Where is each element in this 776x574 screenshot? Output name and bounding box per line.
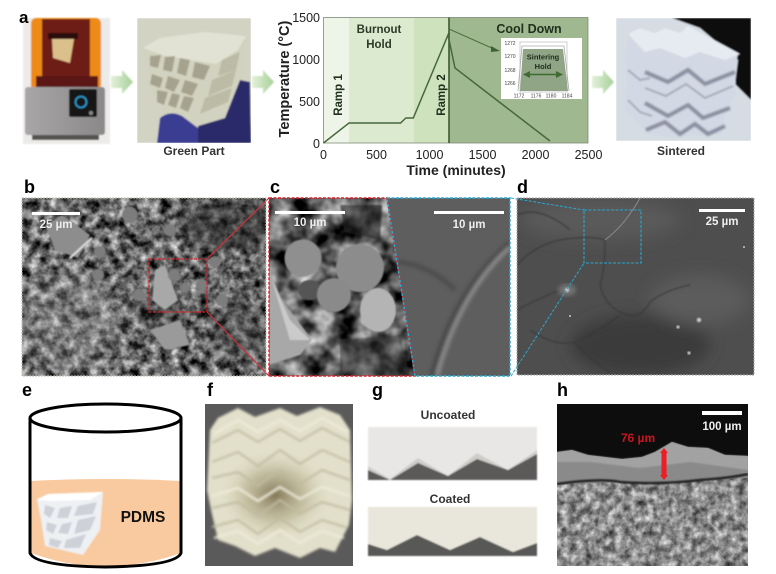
scale bar c right xyxy=(434,211,504,231)
zone label: ramp 2: Ramp 2 xyxy=(436,74,448,116)
label: Uncoated: Uncoated xyxy=(421,408,475,422)
inset: sintering hold: 1184 xyxy=(562,94,573,100)
panel c: smooth coated SEM image xyxy=(387,198,510,376)
scale bar c left: 10 µm xyxy=(294,217,326,229)
panel f label: f xyxy=(207,380,214,400)
scale bar b xyxy=(32,212,80,231)
inset: sintering hold: 1180 xyxy=(546,94,557,100)
zone: cool down xyxy=(449,18,588,143)
blue zoom lines c to d xyxy=(511,198,584,376)
inset: sintering hold: 1270 xyxy=(504,54,516,60)
immersed lattice xyxy=(37,492,103,555)
zone label: cool down: Cool Down xyxy=(496,22,562,36)
zone label: burnout hold: Hold xyxy=(366,39,392,51)
y axis tick labels: 1000 xyxy=(292,53,320,67)
zone: ramp 2 xyxy=(414,18,449,143)
scale bar d xyxy=(699,209,745,228)
panel c label: c xyxy=(270,177,280,197)
arrow: printer to green part xyxy=(111,70,133,94)
scale bar c right: 10 µm xyxy=(453,219,485,231)
zone: burnout hold xyxy=(349,18,414,143)
zone label: burnout hold: Burnout xyxy=(357,24,402,36)
chart: temperature profile xyxy=(277,11,602,178)
panel b label: b xyxy=(24,177,35,197)
temperature curve xyxy=(324,35,550,143)
panel e label: e xyxy=(22,380,32,400)
zoom indicators and borders xyxy=(22,198,754,376)
scale bar h: 100 µm xyxy=(702,421,742,433)
panel a label: a xyxy=(19,8,29,27)
x axis tick labels: 2000 xyxy=(522,148,549,162)
panel h: cross-section SEM xyxy=(557,404,748,566)
PDMS liquid xyxy=(31,479,181,566)
y axis tick labels: 0 xyxy=(313,137,320,151)
substrate texture xyxy=(557,478,748,566)
panel h label: h xyxy=(557,380,568,400)
scale bar d: 25 µm xyxy=(706,216,738,228)
photo: uncoated xyxy=(368,427,537,480)
label: Green Part: Green Part xyxy=(163,144,225,158)
scale bar h xyxy=(702,411,742,433)
inset: sintering hold xyxy=(501,38,582,100)
panel f: coated lattice photo xyxy=(205,404,353,566)
panel g label: g xyxy=(372,380,383,400)
red zoom lines b to c xyxy=(207,198,269,376)
arrow: chart to sintered xyxy=(592,70,614,94)
inset: sintering hold: Sintering xyxy=(527,52,560,62)
inset: sintering hold: 1172 xyxy=(514,94,525,100)
panel c blue border xyxy=(387,198,510,376)
label: Coated: Coated xyxy=(430,492,470,506)
panel d: smooth SEM overview xyxy=(517,198,754,375)
y axis tick labels: 1500 xyxy=(292,11,320,25)
zone label: ramp 1: Ramp 1 xyxy=(333,74,345,116)
panel g: coated comparison xyxy=(368,492,537,556)
y axis tick labels: 500 xyxy=(299,95,320,109)
panel c red border xyxy=(269,198,415,376)
panel e: beaker with PDMS xyxy=(30,404,181,567)
inset: sintering hold: 1176 xyxy=(531,94,542,100)
panel g: uncoated comparison xyxy=(368,408,537,480)
inset: sintering hold: Hold xyxy=(535,62,552,71)
coating layer xyxy=(557,442,748,484)
arrow: green part to chart xyxy=(252,70,274,94)
label: Sintered: Sintered xyxy=(657,144,705,158)
thickness annotation: 76 µm: 76 µm xyxy=(621,431,655,445)
x axis tick labels: 0 xyxy=(320,148,327,162)
panel b: rough SEM image xyxy=(15,198,280,376)
scale bar b: 25 µm xyxy=(40,219,72,231)
icon: 3D printer xyxy=(23,18,110,144)
x axis tick labels: 1000 xyxy=(416,148,443,162)
x axis tick labels: 1500 xyxy=(469,148,496,162)
y axis tick labels xyxy=(292,11,320,151)
photo: green part xyxy=(137,18,251,143)
panel d label: d xyxy=(517,177,528,197)
x axis tick labels xyxy=(320,148,602,162)
photo: sintered part xyxy=(616,18,751,141)
x axis tick labels: 2500 xyxy=(575,148,602,162)
beaker outline xyxy=(30,404,181,567)
scale bar c left xyxy=(275,211,345,229)
inset: sintering hold: 1266 xyxy=(504,81,516,87)
panel c: zoomed rough SEM image xyxy=(269,198,419,376)
inset: sintering hold: 1268 xyxy=(504,68,516,74)
red zoom box in b xyxy=(149,259,207,312)
inset: sintering hold: 1272 xyxy=(504,41,516,47)
blue zoom box in d xyxy=(584,210,641,263)
x axis tick labels: 500 xyxy=(366,148,387,162)
zone: ramp 1 xyxy=(324,18,349,143)
photo: coated xyxy=(368,507,537,556)
label: PDMS: PDMS xyxy=(121,509,165,526)
arrow: peak to inset xyxy=(449,29,500,52)
x axis title: Time (minutes) xyxy=(406,162,506,178)
thickness annotation: 76 µm xyxy=(621,431,668,480)
y axis title: Temperature (°C) xyxy=(277,20,293,137)
